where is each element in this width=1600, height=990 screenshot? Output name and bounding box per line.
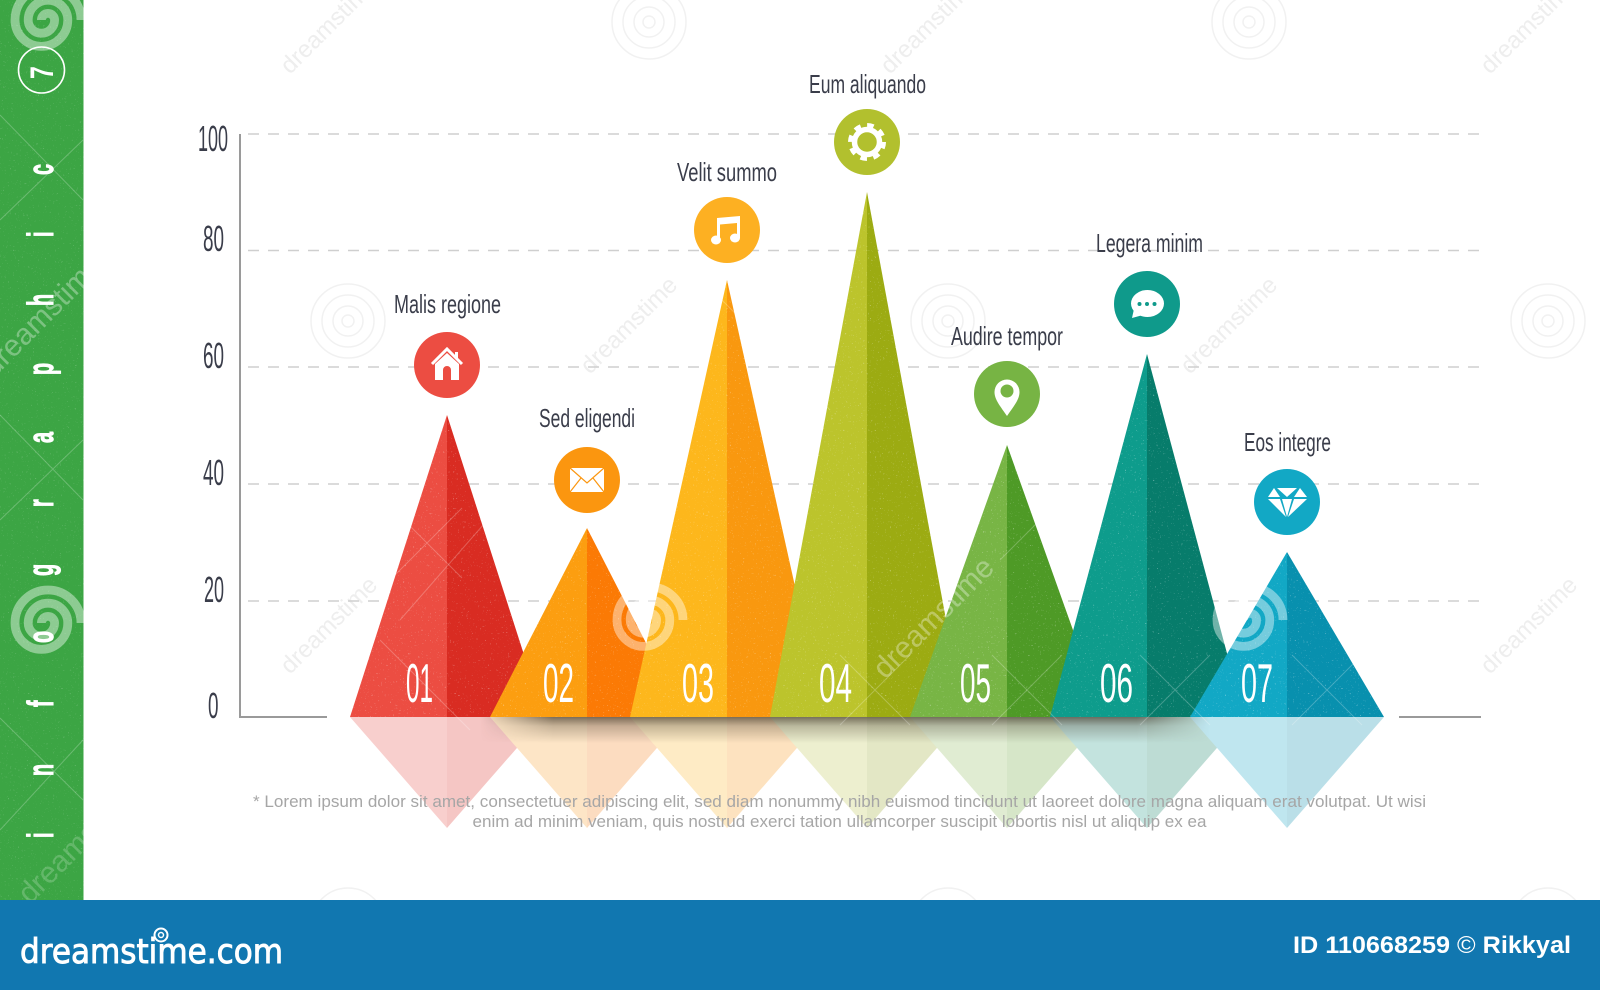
infographic canvas: dreamstime (1475, 571, 1583, 679)
pyramid labels: Sed eligendi (539, 403, 635, 433)
footer credit: ID 110668259 © Rikkyal (1293, 932, 1571, 959)
sidebar title letters: i (22, 832, 62, 838)
sidebar title letters: f (22, 700, 62, 707)
infographic canvas: dreamstime (575, 271, 683, 379)
sidebar number badge (18, 47, 64, 93)
grid lines (248, 134, 1480, 601)
pyramid labels: Eos integre (1244, 427, 1331, 457)
pyramid numbers: 05 (960, 652, 991, 714)
watermark overlay (0, 0, 1362, 910)
faint watermark on white background (311, 0, 1585, 962)
footnote text: * Lorem ipsum dolor sit amet, consectetuer adipiscing elit, sed diam nonummy nibh euismod tincidunt ut laoreet dolore magna aliquam erat volutpat. Ut wisi (253, 793, 1426, 811)
sidebar title letters: r (22, 499, 62, 507)
sidebar title letters: i (22, 231, 62, 237)
pyramid 03 (630, 280, 824, 717)
footnote text: enim ad minim veniam, quis nostrud exerci tation ullamcorper suscipit lobortis nisl ut aliquip ex ea (472, 813, 1207, 831)
pyramid numbers (406, 652, 1273, 714)
pyramid labels (394, 69, 1331, 457)
icon: gear (834, 109, 900, 175)
pyramid labels: Velit summo (677, 157, 777, 187)
y axis with tick labels: 100 (198, 118, 228, 159)
pyramid numbers: 03 (682, 652, 714, 714)
watermark overlay: dreamstime (12, 776, 146, 910)
icon: speech bubble (1114, 271, 1180, 337)
reflections under the pyramids (350, 717, 1384, 828)
y axis with tick labels: 20 (204, 569, 224, 610)
pyramid labels: Audire tempor (951, 321, 1063, 351)
pyramid 05 (910, 445, 1104, 717)
pyramid 06 (1050, 354, 1244, 717)
base shadow (484, 717, 1206, 740)
y axis with tick labels: 60 (203, 335, 224, 376)
pyramid 04 (770, 192, 964, 717)
watermark overlay: dreamstime (867, 551, 1001, 685)
footnote text (253, 793, 1426, 831)
pyramid 02 (490, 528, 684, 717)
y axis with tick labels: 80 (203, 218, 224, 259)
sidebar title letters: h (22, 294, 62, 306)
icon: diamond (1254, 469, 1320, 535)
sidebar title letters: c (22, 164, 62, 175)
panel: footer bar (0, 900, 1600, 990)
pyramid labels: Legera minim (1096, 228, 1203, 258)
pyramid numbers: 07 (1241, 652, 1273, 714)
pyramid 07 (1190, 552, 1384, 717)
y axis with tick labels: 40 (203, 452, 224, 493)
y axis with tick labels (198, 118, 1481, 726)
pyramid labels: Malis regione (394, 289, 501, 319)
sidebar title letters (22, 164, 62, 838)
pyramid 01 (350, 415, 544, 717)
icon: envelope (554, 447, 620, 513)
y axis with tick labels: 0 (208, 685, 218, 726)
infographic canvas: dreamstime (1175, 271, 1283, 379)
sidebar title letters: o (22, 631, 62, 643)
icon: map pin (974, 361, 1040, 427)
panel: green sidebar (0, 0, 84, 900)
sidebar title letters: n (22, 764, 62, 776)
pyramid numbers: 06 (1100, 652, 1133, 714)
sidebar title letters: g (22, 564, 62, 576)
footer logo: dreamstime.com (20, 932, 283, 972)
sidebar title letters: p (22, 363, 62, 375)
infographic canvas: dreamstime (275, 571, 383, 679)
sidebar title letters: a (22, 431, 62, 443)
pyramid numbers: 01 (406, 652, 433, 714)
sidebar number badge: 7 (24, 66, 60, 79)
pyramid numbers: 04 (819, 652, 852, 714)
icon: house (414, 332, 480, 398)
pyramid numbers: 02 (543, 652, 574, 714)
pyramid labels: Eum aliquando (809, 69, 926, 99)
pyramid speckle (350, 192, 1384, 717)
icon: music note (694, 197, 760, 263)
